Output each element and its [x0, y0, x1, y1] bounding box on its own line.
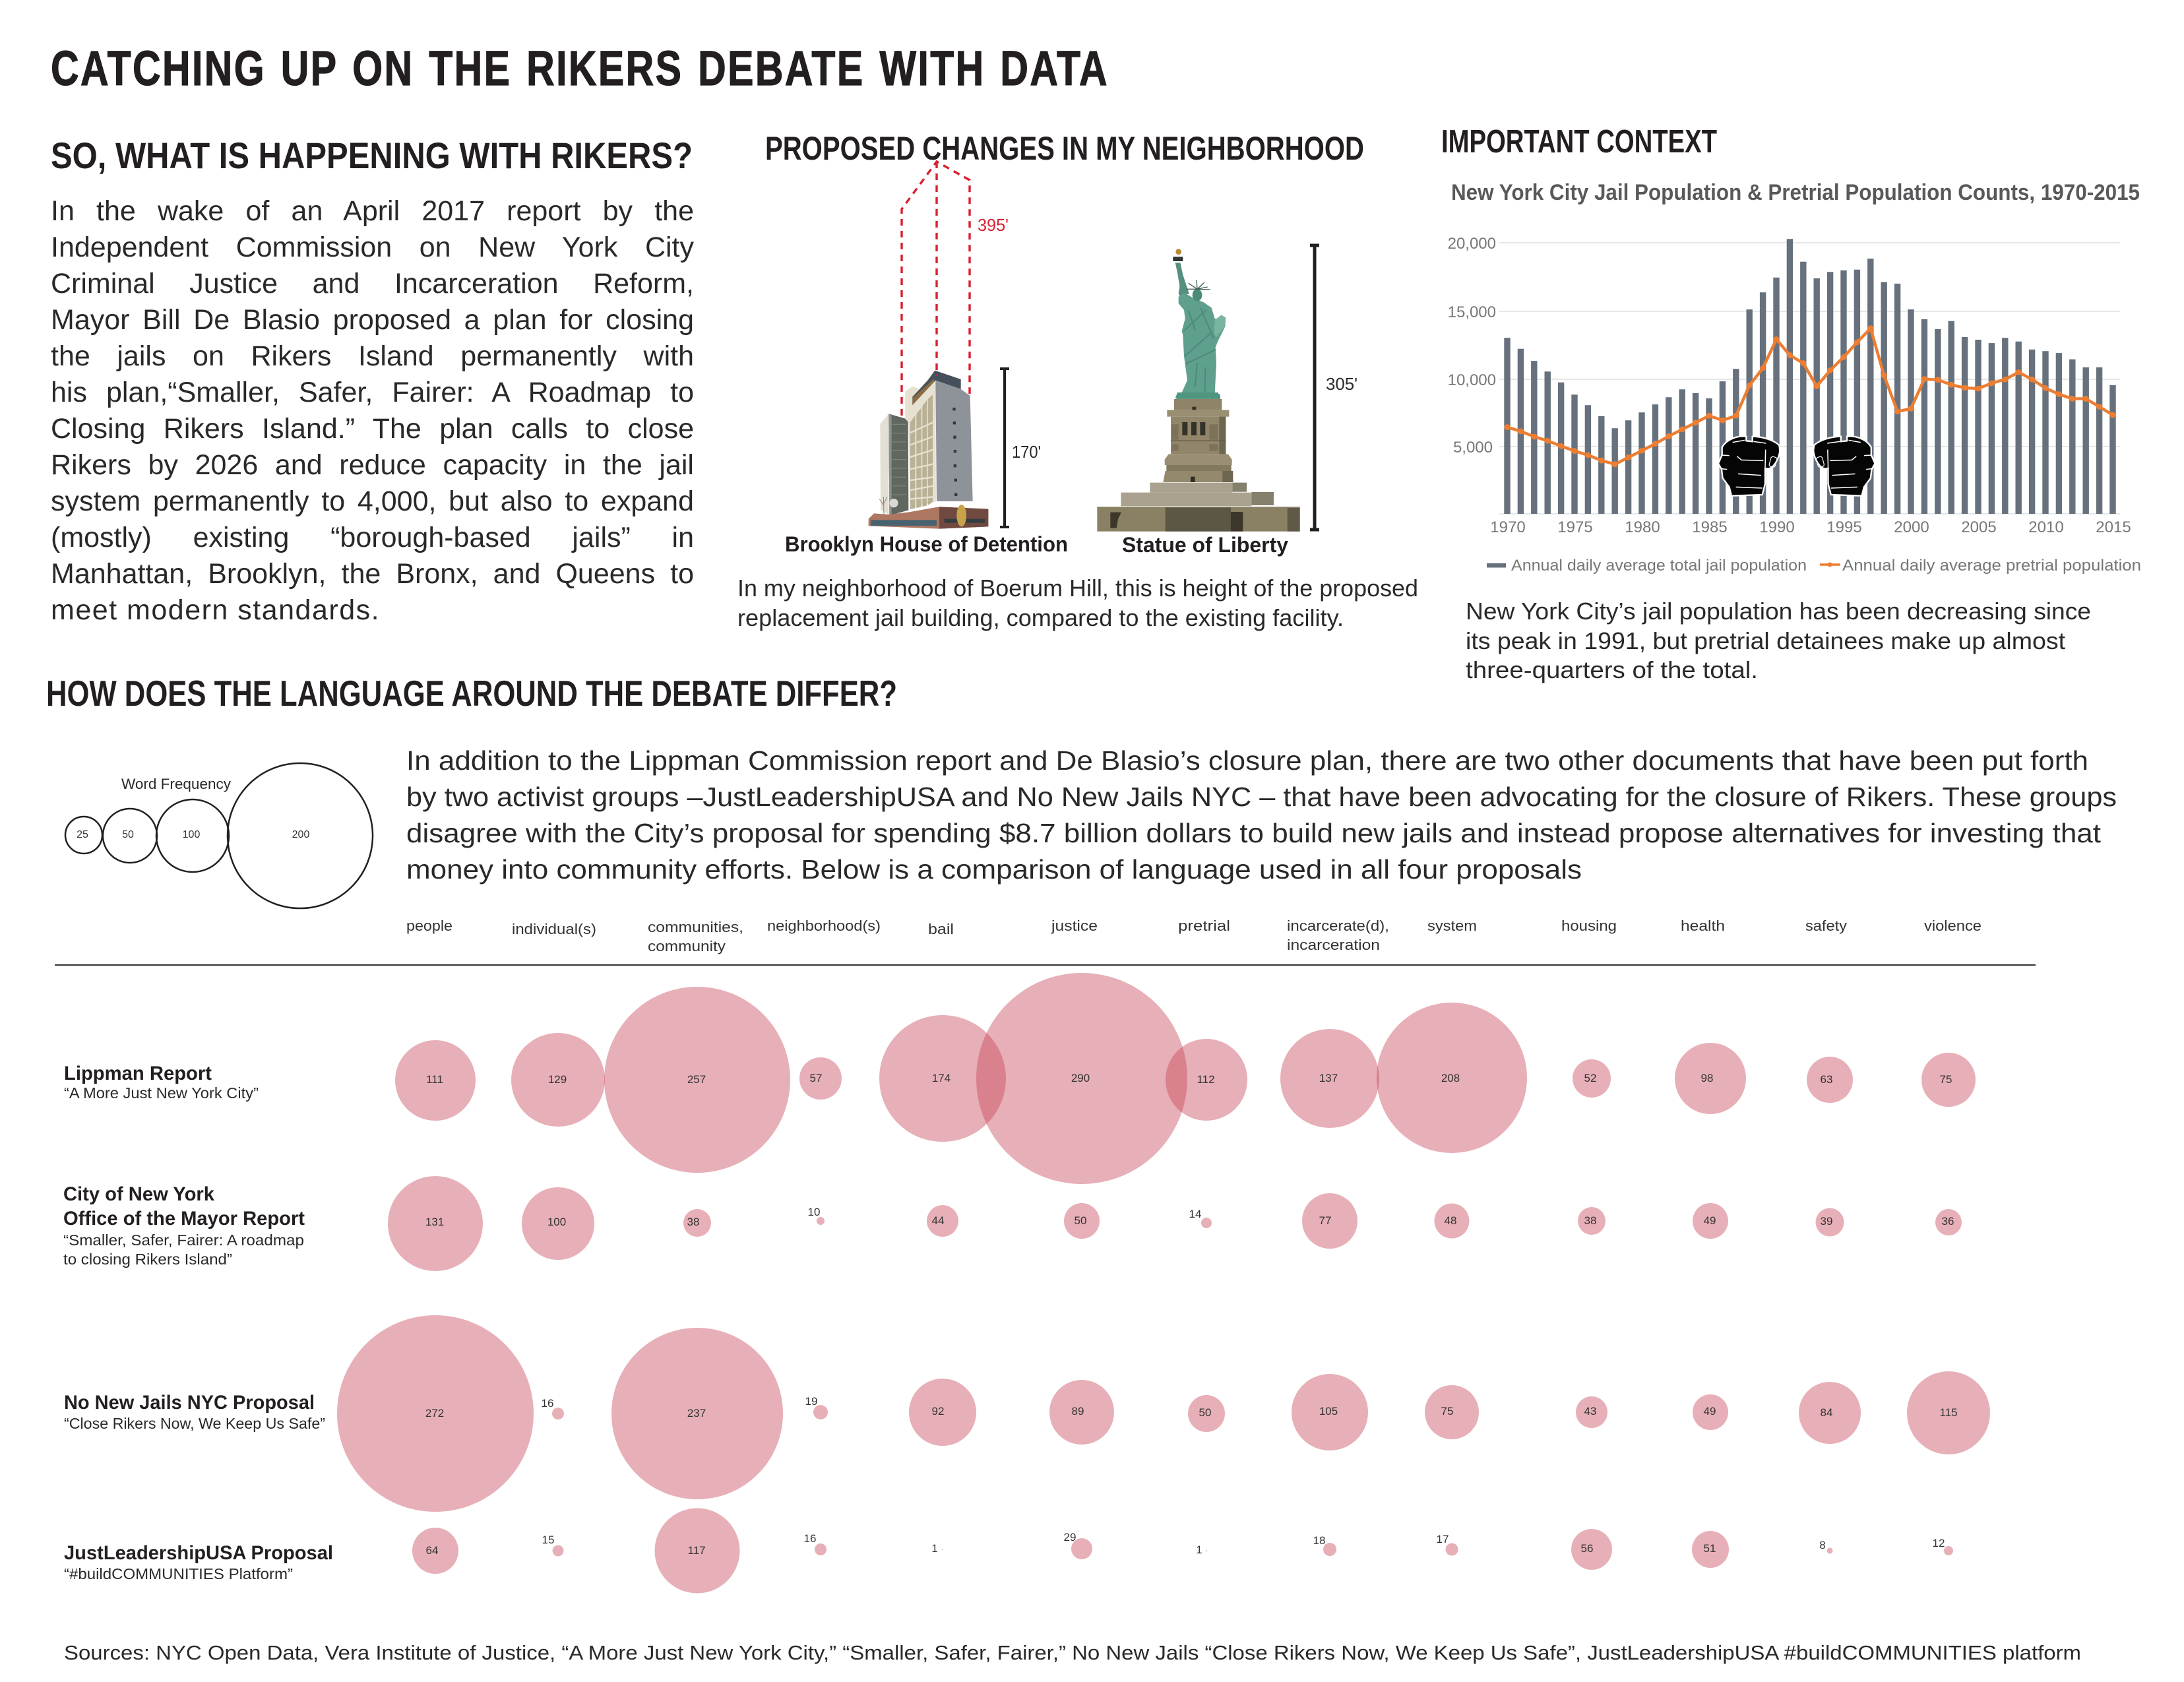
text: Rikers explanation paragraph: Manhattan, Brooklyn, the Bronx, and Queens to: [51, 558, 694, 590]
label: No New Jails: No New Jails NYC Proposal: [64, 1392, 315, 1414]
people 111: 111: [426, 1073, 443, 1086]
bail 1: [931, 1542, 943, 1555]
column headers: people: [406, 918, 452, 934]
pretrial 50: [1188, 1395, 1225, 1432]
title: CATCHING UP ON THE RIKERS DEBATE WITH DATA: [51, 41, 1109, 96]
pretrial 14: 14: [1189, 1208, 1201, 1220]
violence 36: [1935, 1209, 1962, 1235]
column headers: communities,: [648, 919, 743, 935]
neighborhoods 19: [805, 1395, 828, 1419]
bars: total jail population: [1507, 239, 2113, 514]
text: Rikers explanation paragraph: the jails on Rikers Island permanently with: [51, 340, 694, 372]
violence 12: 12: [1933, 1537, 1945, 1549]
incarceration 105: 105: [1319, 1405, 1338, 1417]
neighborhoods 19: 19: [805, 1395, 817, 1408]
bail 92: [909, 1379, 976, 1446]
individuals 100: [522, 1187, 594, 1260]
neighborhoods 57: 57: [810, 1072, 822, 1084]
x axis labels: 2000: [1894, 518, 1929, 536]
neighborhoods 10: 10: [808, 1206, 820, 1218]
bail 44: 44: [932, 1214, 944, 1227]
bail 174: [879, 1015, 1006, 1142]
violence 115: 115: [1939, 1406, 1958, 1419]
label: 170 feet: 170': [1012, 442, 1041, 462]
housing 43: 43: [1584, 1405, 1596, 1417]
neighborhoods 16: [804, 1532, 827, 1555]
column headers: community: [648, 938, 726, 954]
x axis labels: 2010: [2028, 518, 2064, 536]
panel: proposed changes in my neighborhood: [737, 130, 1418, 631]
column headers: system: [1427, 918, 1477, 934]
pretrial 1: 1: [1196, 1543, 1202, 1556]
line: pretrial population: [1507, 328, 2113, 464]
label: Statue of Liberty: Statue of Liberty: [1122, 533, 1288, 557]
chart legend: Annual daily average pretrial population: [1842, 557, 2141, 575]
system 208: [1377, 1003, 1527, 1153]
legend: word frequency: Word Frequency: [121, 776, 231, 792]
individuals 100: 100: [547, 1216, 566, 1228]
people 111: [395, 1040, 476, 1121]
incarceration 77: [1302, 1193, 1357, 1249]
column headers: incarceration: [1287, 937, 1380, 953]
communities 38: [683, 1209, 711, 1237]
row: Mayor report: [388, 1176, 1962, 1271]
icon: Statue of Liberty: [1097, 249, 1300, 532]
individuals 15: 15: [542, 1534, 554, 1546]
health 51: 51: [1704, 1542, 1716, 1555]
bail 44: [927, 1205, 958, 1237]
housing 38: 38: [1584, 1214, 1596, 1227]
chart legend: Annual daily average total jail population: [1511, 557, 1807, 575]
legend: word frequency: 100: [183, 829, 200, 840]
label: Mayor report: City of New York: [63, 1183, 214, 1205]
column headers: justice: [1051, 918, 1098, 934]
text: neighborhood description: In my neighborhood of Boerum Hill, this is height of the proposed: [737, 575, 1418, 602]
label: Lippman Report: Lippman Report: [64, 1063, 212, 1084]
label: JustLeadershipUSA: [64, 1542, 333, 1582]
individuals 16: 16: [542, 1397, 553, 1410]
icon: right fist: [1813, 436, 1875, 496]
system 48: [1434, 1203, 1470, 1239]
text: Rikers explanation paragraph: Mayor Bill De Blasio proposed a plan for closing: [51, 303, 694, 335]
y axis labels: 5,000: [1453, 439, 1493, 456]
justice 89: [1049, 1380, 1114, 1445]
text: chart caption: New York City’s jail population has been decreasing since: [1466, 598, 2091, 625]
heading: proposed changes: PROPOSED CHANGES IN MY NEIGHBORHOOD: [765, 130, 1364, 167]
text: Rikers explanation paragraph: Closing Rikers Island.” The plan calls to close: [51, 413, 694, 445]
text: intro paragraph: disagree with the City’s proposal for spending $8.7 billion dollars to build new jails and instead propose alternatives for investing that: [406, 818, 2102, 848]
y axis labels: [1448, 235, 1496, 456]
label: Brooklyn House of Detention: Brooklyn House of Detention: [785, 532, 1068, 556]
health 49: 49: [1704, 1405, 1716, 1417]
justice 50: [1064, 1203, 1100, 1239]
people 272: [337, 1315, 534, 1512]
justice 29: 29: [1064, 1531, 1076, 1543]
safety 39: [1815, 1208, 1844, 1236]
text: intro paragraph: [406, 745, 2117, 885]
y axis labels: 10,000: [1448, 371, 1496, 389]
bail 92: 92: [932, 1405, 944, 1417]
individuals 129: 129: [548, 1073, 567, 1086]
label: Lippman Report: “A More Just New York City”: [64, 1084, 259, 1102]
column headers: health: [1681, 918, 1725, 934]
bail 174: 174: [932, 1072, 951, 1084]
bubble chart: word counts: [337, 973, 1990, 1594]
violence 36: 36: [1942, 1215, 1954, 1228]
pretrial 14: [1189, 1208, 1212, 1228]
label: 305 feet: 305': [1326, 374, 1357, 394]
pretrial 50: 50: [1199, 1406, 1211, 1419]
health 98: 98: [1701, 1072, 1713, 1084]
text: chart caption: its peak in 1991, but pretrial detainees make up almost: [1466, 627, 2065, 654]
safety 84: [1799, 1382, 1861, 1444]
safety 84: 84: [1821, 1406, 1832, 1419]
legend: word frequency: [65, 763, 373, 908]
incarceration 137: [1280, 1029, 1379, 1128]
incarceration 77: 77: [1319, 1214, 1331, 1227]
column headers: [406, 918, 1981, 954]
column headers: pretrial: [1178, 918, 1230, 934]
row: JustLeadershipUSA: [412, 1508, 1953, 1594]
label: Mayor report: [63, 1183, 305, 1268]
housing 56: 56: [1581, 1542, 1593, 1555]
people 131: [388, 1176, 483, 1271]
text: neighborhood description: [737, 575, 1418, 631]
x axis labels: 1995: [1826, 518, 1862, 536]
neighborhoods 10: [808, 1206, 825, 1225]
x axis labels: 1970: [1490, 518, 1526, 536]
system 75: 75: [1441, 1405, 1453, 1417]
scale bar: 305 feet: [1310, 245, 1319, 530]
housing 38: [1578, 1207, 1606, 1235]
communities 117: [654, 1508, 740, 1594]
justice 290: 290: [1071, 1072, 1090, 1084]
x axis labels: 1985: [1692, 518, 1728, 536]
communities 257: 257: [687, 1073, 706, 1086]
row: Lippman Report: [395, 973, 1976, 1184]
y axis labels: 20,000: [1448, 235, 1496, 253]
health 49: 49: [1704, 1214, 1716, 1227]
text: intro paragraph: by two activist groups –JustLeadershipUSA and No New Jails NYC – that have been advocating for the closure of Rikers. These groups: [406, 782, 2117, 812]
label: 395 feet: 395': [978, 215, 1009, 235]
violence 115: [1907, 1371, 1990, 1454]
chart legend: [1487, 557, 2141, 575]
label: No New Jails: [64, 1392, 325, 1432]
x axis labels: 1990: [1759, 518, 1795, 536]
text: Rikers explanation paragraph: In the wake of an April 2017 report by the: [51, 195, 694, 227]
column headers: bail: [928, 921, 954, 937]
housing 52: 52: [1584, 1072, 1596, 1084]
text: Rikers explanation paragraph: (mostly) existing “borough-based jails” in: [51, 521, 694, 553]
text: Rikers explanation paragraph: Independent Commission on New York City: [51, 231, 694, 263]
x axis labels: 1980: [1625, 518, 1660, 536]
people 272: 272: [425, 1407, 444, 1419]
system 17: [1437, 1533, 1458, 1555]
proposed building dashed outline: [902, 162, 970, 416]
text: neighborhood description: replacement jail building, compared to the existing facility.: [737, 604, 1344, 631]
statue figure: [1173, 249, 1226, 399]
text: chart caption: three-quarters of the total.: [1466, 656, 1758, 683]
justice 89: 89: [1072, 1405, 1084, 1417]
legend: word frequency: 25: [77, 829, 88, 840]
label: No New Jails: “Close Rikers Now, We Keep Us Safe”: [64, 1415, 325, 1432]
label: Lippman Report: [64, 1063, 259, 1102]
text: Rikers explanation paragraph: Criminal Justice and Incarceration Reform,: [51, 268, 694, 299]
x axis labels: 2015: [2096, 518, 2131, 536]
row: No New Jails: [337, 1315, 1990, 1512]
safety 63: [1807, 1057, 1853, 1103]
individuals 15: [542, 1534, 563, 1557]
legend: word frequency: 50: [122, 829, 134, 840]
justice 50: 50: [1075, 1214, 1086, 1227]
people 131: 131: [425, 1216, 444, 1228]
incarceration 105: [1292, 1374, 1368, 1450]
system 75: [1425, 1385, 1479, 1439]
system 208: 208: [1441, 1072, 1460, 1084]
people 64: 64: [426, 1544, 438, 1557]
chart title: New York City Jail Population & Pretrial Population Counts, 1970-2015: [1451, 180, 2140, 205]
communities 117: 117: [687, 1544, 706, 1557]
incarceration 137: 137: [1319, 1072, 1338, 1084]
individuals 129: [511, 1033, 605, 1127]
system 17: 17: [1437, 1533, 1449, 1545]
text: Rikers explanation paragraph: his plan,“Smaller, Safer, Fairer: A Roadmap to: [51, 376, 694, 408]
health 51: [1692, 1531, 1729, 1568]
communities 257: [604, 987, 790, 1173]
pretrial 112: 112: [1197, 1073, 1215, 1086]
column headers: individual(s): [512, 921, 596, 937]
icon: Brooklyn House of Detention building: [869, 371, 988, 529]
x axis labels: 1975: [1557, 518, 1593, 536]
bail 1: 1: [931, 1542, 938, 1555]
heading: how does the language differ: HOW DOES THE LANGUAGE AROUND THE DEBATE DIFFER?: [46, 673, 897, 714]
row labels: [63, 1063, 333, 1582]
safety 8: 8: [1819, 1539, 1826, 1551]
legend: word frequency: 200: [292, 829, 309, 840]
communities 38: 38: [687, 1216, 699, 1228]
individuals 16: [542, 1397, 564, 1419]
safety 8: [1819, 1539, 1832, 1554]
housing 52: [1573, 1059, 1611, 1098]
label: Mayor report: to closing Rikers Island”: [63, 1251, 232, 1268]
statue pedestal: [1097, 392, 1300, 532]
bar and line chart: jail population: [1448, 235, 2131, 536]
heading: important context: IMPORTANT CONTEXT: [1441, 124, 1717, 160]
pretrial 112: [1166, 1039, 1247, 1121]
incarceration 18: 18: [1313, 1534, 1325, 1547]
safety 39: 39: [1821, 1215, 1832, 1228]
label: JustLeadershipUSA: “#buildCOMMUNITIES Platform”: [64, 1565, 293, 1582]
health 98: [1675, 1043, 1746, 1114]
communities 237: 237: [687, 1407, 706, 1419]
icon: left fist: [1718, 436, 1780, 496]
text: Rikers explanation paragraph: Rikers by 2026 and reduce capacity in the jail: [51, 449, 694, 480]
neighborhoods 16: 16: [804, 1532, 816, 1545]
housing 56: [1571, 1529, 1612, 1570]
health 49: [1693, 1394, 1728, 1430]
violence 12: [1933, 1537, 1953, 1555]
x axis labels: [1490, 518, 2131, 536]
column headers: housing: [1561, 918, 1617, 934]
health 49: [1693, 1203, 1728, 1239]
text: chart caption: [1466, 598, 2091, 683]
text: intro paragraph: money into community efforts. Below is a comparison of language used in all four proposals: [406, 854, 1582, 885]
text: Rikers explanation paragraph: meet modern standards.: [51, 594, 380, 625]
column headers: violence: [1924, 918, 1981, 934]
column headers: safety: [1805, 918, 1847, 934]
people 64: [412, 1528, 458, 1574]
label: Mayor report: “Smaller, Safer, Fairer: A roadmap: [63, 1231, 304, 1249]
column headers: neighborhood(s): [767, 918, 881, 934]
label: JustLeadershipUSA: JustLeadershipUSA Proposal: [64, 1542, 333, 1564]
x axis labels: 2005: [1961, 518, 1997, 536]
communities 237: [611, 1328, 783, 1499]
pretrial 1: [1196, 1543, 1207, 1556]
safety 63: 63: [1821, 1073, 1832, 1086]
text: Rikers explanation paragraph: [51, 195, 694, 625]
incarceration 18: [1313, 1534, 1336, 1556]
text: intro paragraph: In addition to the Lippman Commission report and De Blasio’s closure plan, there are two other documents that have been put forth: [406, 745, 2088, 776]
violence 75: 75: [1940, 1073, 1952, 1086]
system 48: 48: [1445, 1214, 1456, 1227]
violence 75: [1921, 1053, 1976, 1107]
sources: Sources: NYC Open Data, Vera Institute of Justice, “A More Just New York City,” “Smaller, Safer, Fairer,” No New Jails “Close Rikers Now, We Keep Us Safe”, JustLeadershipUSA #buildCOMMUNITIES platform: [64, 1641, 2081, 1664]
heading: so what is happening: SO, WHAT IS HAPPENING WITH RIKERS?: [51, 135, 693, 176]
text: Rikers explanation paragraph: system permanently to 4,000, but also to expand: [51, 485, 694, 517]
y axis labels: 15,000: [1448, 303, 1496, 321]
housing 43: [1576, 1396, 1607, 1428]
justice 290: [976, 973, 1187, 1184]
justice 29: [1064, 1531, 1092, 1559]
neighborhoods 57: [799, 1057, 842, 1100]
scale bar: 170 feet: [1000, 369, 1009, 527]
panel: important context: [1441, 124, 2141, 683]
label: Mayor report: Office of the Mayor Report: [63, 1208, 305, 1230]
column headers: incarcerate(d),: [1287, 918, 1389, 934]
